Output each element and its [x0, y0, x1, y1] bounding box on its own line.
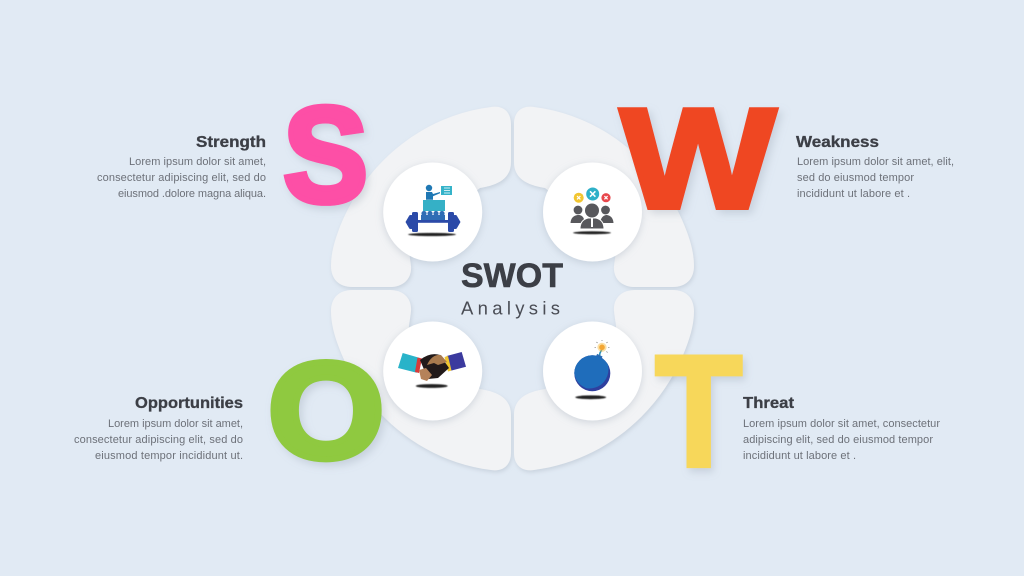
- body: opportunities: eiusmod tempor incididunt ut.: [95, 450, 243, 462]
- petal ring: [331, 107, 694, 470]
- body: opportunities: Lorem ipsum dolor sit amet,: [108, 418, 243, 430]
- body: threat: adipiscing elit, sed do eiusmod tempor: [743, 434, 933, 446]
- body: strength: [97, 156, 266, 200]
- body: weakness: Lorem ipsum dolor sit amet, elit,: [797, 156, 954, 168]
- body: strength: Lorem ipsum dolor sit amet,: [129, 156, 266, 168]
- text block: weakness: [796, 134, 954, 200]
- body: strength: consectetur adipiscing elit, sed do: [97, 172, 266, 184]
- body: weakness: incididunt ut labore et .: [797, 188, 910, 200]
- heading: weakness: Weakness: [796, 134, 879, 151]
- body: weakness: [797, 156, 954, 200]
- body: opportunities: [74, 418, 243, 462]
- letter W: W: [620, 79, 776, 238]
- heading: threat: Threat: [743, 395, 794, 412]
- body: opportunities: consectetur adipiscing elit, sed do: [74, 434, 243, 446]
- petal: weakness: [514, 107, 694, 287]
- circle: weakness: [543, 162, 642, 262]
- icon: handshake: [398, 352, 466, 388]
- icon: team with crosses: [570, 188, 614, 234]
- text block: opportunities: [74, 395, 243, 462]
- heading: strength: Strength: [196, 134, 266, 151]
- body: threat: Lorem ipsum dolor sit amet, consectetur: [743, 418, 940, 430]
- letter S: S: [283, 79, 368, 231]
- icon: bomb: [574, 340, 610, 399]
- petal: strength: [331, 107, 511, 287]
- body: threat: [743, 418, 940, 462]
- icon: barbell with presenter: [406, 185, 460, 236]
- letter T: T: [655, 323, 742, 501]
- text block: threat: [743, 395, 940, 462]
- body: threat: incididunt ut labore et .: [743, 450, 856, 462]
- body: weakness: sed do eiusmod tempor: [797, 172, 914, 184]
- text block: strength: [97, 134, 266, 200]
- letter O: O: [268, 333, 385, 488]
- circle: threat: [543, 322, 642, 420]
- title: Analysis: Analysis: [461, 298, 560, 318]
- petal: threat: [514, 290, 694, 470]
- circle: opportunities: [383, 322, 482, 420]
- heading: opportunities: Opportunities: [135, 395, 243, 412]
- circle: strength: [383, 162, 482, 262]
- title: SWOT: SWOT: [461, 257, 563, 295]
- body: strength: eiusmod .dolore magna aliqua.: [118, 188, 266, 200]
- title: [461, 257, 563, 318]
- petal: opportunities: [331, 290, 511, 470]
